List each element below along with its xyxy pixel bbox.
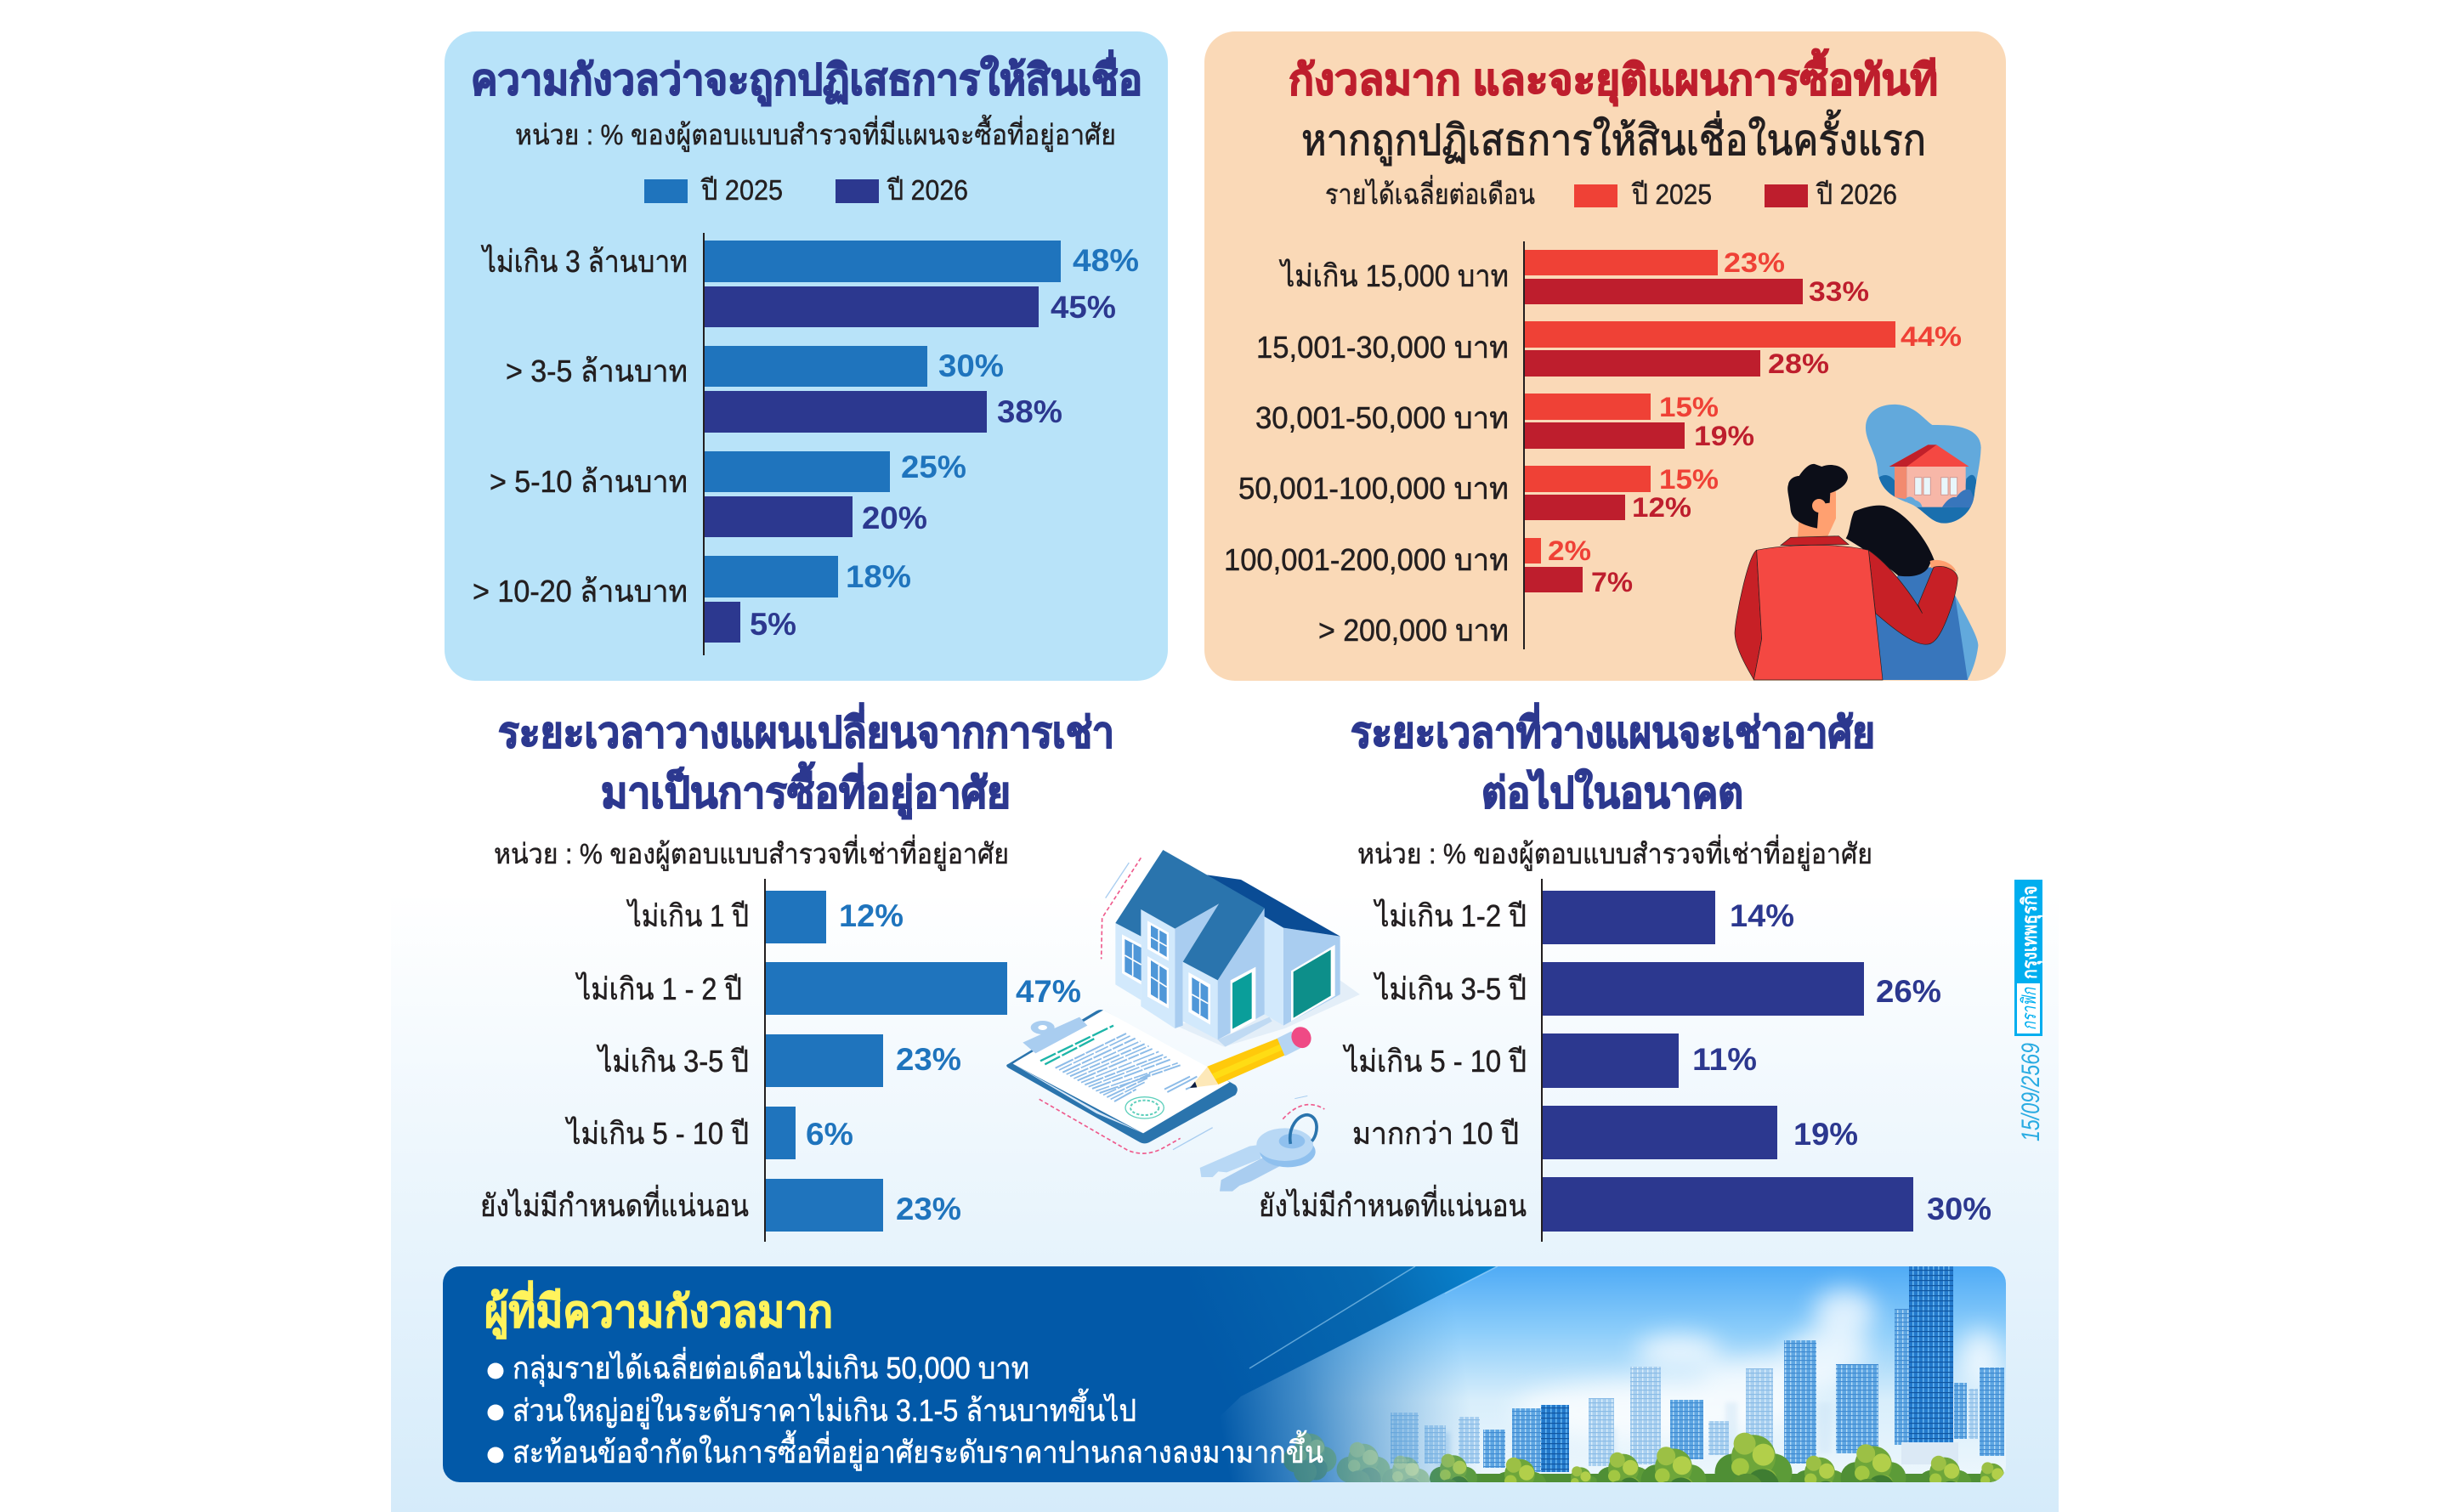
credit tag and date: กรุงเทพธุรกิจ xyxy=(2019,886,2043,979)
bar chart: years of renting: ไม่เกิน 3-5 ปี xyxy=(1373,971,1527,1006)
bar chart: years of renting: ยังไม่มีกำหนดที่แน่นอน xyxy=(1259,1185,1527,1223)
legend: ปี 2025 xyxy=(700,174,783,206)
page background gradient xyxy=(391,892,2059,1512)
heading: ระยะเวลาที่วางแผนจะเช่าอาศัย xyxy=(1351,703,1875,756)
bar chart: price bands: 5% xyxy=(750,607,796,642)
bar chart: income bands: 44% xyxy=(1901,321,1962,352)
panel: stop buying plan by income xyxy=(1204,31,2006,681)
woman xyxy=(1846,506,1978,680)
bar chart: price bands: 38% xyxy=(997,394,1062,429)
bar chart: income bands: 19% xyxy=(1694,421,1754,451)
bar chart: income bands: 12% xyxy=(1632,492,1691,523)
panel heading: ความกังวลว่าจะถูกปฏิเสธการให้สินเชื่อ xyxy=(471,50,1142,106)
banner bullet points: กลุ่มรายได้เฉลี่ยต่อเดือนไม่เกิน 50,000 บาท xyxy=(513,1347,1029,1387)
bar chart: income bands: > 200,000 บาท xyxy=(1318,613,1509,648)
bar chart: income bands: 30,001-50,000 บาท xyxy=(1255,400,1509,435)
heading xyxy=(1351,703,1875,817)
illustration: couple dreaming of a house xyxy=(1735,405,1983,680)
bar chart: years until buying: 12% xyxy=(839,898,904,933)
bar chart: price bands: 30% xyxy=(938,348,1004,383)
bar chart: years until buying: 6% xyxy=(806,1117,853,1152)
bar chart: income bands: 33% xyxy=(1809,276,1869,307)
banner bullet points: ส่วนใหญ่อยู่ในระดับราคาไม่เกิน 3.1-5 ล้านบาทขึ้นไป xyxy=(513,1388,1136,1430)
bar chart: price bands: 25% xyxy=(901,450,966,484)
bar chart: price bands: 45% xyxy=(1051,290,1116,325)
heading: ระยะเวลาวางแผนเปลี่ยนจากการเช่า xyxy=(498,703,1114,756)
legend xyxy=(644,174,968,206)
bar chart: price bands: ไม่เกิน 3 ล้านบาท xyxy=(480,244,688,279)
bar chart: income bands: 15,001-30,000 บาท xyxy=(1256,330,1509,365)
legend: ปี 2026 xyxy=(1816,178,1897,210)
banner: who is most worried xyxy=(443,1266,2006,1482)
heading: มาเป็นการซื้อที่อยู่อาศัย xyxy=(601,762,1011,819)
bar chart: years until buying: 23% xyxy=(896,1042,961,1077)
bar chart: years of renting: มากกว่า 10 ปี xyxy=(1352,1116,1519,1151)
bar chart: income bands: 2% xyxy=(1548,535,1591,566)
bar chart: years until buying: 23% xyxy=(896,1192,961,1226)
legend: รายได้เฉลี่ยต่อเดือน xyxy=(1325,175,1535,210)
credit tag and date xyxy=(2014,880,2045,1141)
bar chart: income bands xyxy=(1224,241,1962,649)
banner bullet points xyxy=(488,1347,1323,1471)
bar chart: years of renting: 26% xyxy=(1876,974,1941,1009)
illustration: house, contract, pencil and keys xyxy=(1006,850,1360,1192)
bar chart: years of renting: 19% xyxy=(1793,1117,1858,1152)
section: time planned to switch from renting to buying xyxy=(480,703,1114,1242)
banner bullet points: สะท้อนข้อจำกัดในการซื้อที่อยู่อาศัยระดับราคาปานกลางลงมามากขึ้น xyxy=(513,1430,1323,1471)
banner heading: ผู้ที่มีความกังวลมาก xyxy=(484,1281,833,1339)
bar chart: price bands: > 5-10 ล้านบาท xyxy=(490,464,688,499)
bar chart: income bands: 7% xyxy=(1591,567,1633,597)
bar chart: years until buying: ไม่เกิน 1 - 2 ปี xyxy=(575,971,742,1006)
banner skyline photo xyxy=(1227,1266,2006,1482)
bar chart: years of renting xyxy=(1259,879,1991,1242)
thought bubble with house xyxy=(1866,405,1983,526)
bar chart: years until buying: ไม่เกิน 5 - 10 ปี xyxy=(564,1116,749,1151)
heading xyxy=(498,703,1114,819)
bar chart: income bands: 50,001-100,000 บาท xyxy=(1238,471,1509,506)
bar chart: years until buying: ไม่เกิน 3-5 ปี xyxy=(596,1044,749,1079)
panel subheading: หากถูกปฏิเสธการให้สินเชื่อในครั้งแรก xyxy=(1301,110,1926,166)
bar chart: income bands: ไม่เกิน 15,000 บาท xyxy=(1278,258,1509,293)
icon: contract on clipboard xyxy=(1006,1010,1238,1153)
bar chart: income bands: 100,001-200,000 บาท xyxy=(1224,542,1509,577)
panel heading: กังวลมาก และจะยุติแผนการซื้อทันที xyxy=(1289,48,1938,106)
section: planned future renting period xyxy=(1259,703,1991,1242)
bar chart: income bands: 28% xyxy=(1768,348,1829,379)
credit tag and date: 15/09/2569 xyxy=(2017,1043,2045,1141)
heading: ต่อไปในอนาคต xyxy=(1481,768,1743,817)
bar chart: income bands: 23% xyxy=(1724,247,1785,278)
bar chart: years until buying xyxy=(480,879,1081,1242)
bar chart: years until buying: ยังไม่มีกำหนดที่แน่นอน xyxy=(480,1185,749,1223)
legend xyxy=(1325,175,1897,210)
icon: house xyxy=(1102,850,1360,1047)
bar chart: price bands: > 3-5 ล้านบาท xyxy=(506,354,688,388)
bar chart: years of renting: 30% xyxy=(1927,1192,1991,1226)
bar chart: years of renting: 14% xyxy=(1730,898,1794,933)
bar chart: price bands: 48% xyxy=(1073,243,1139,278)
legend: ปี 2026 xyxy=(887,174,968,206)
bar chart: years of renting: 11% xyxy=(1692,1042,1757,1077)
credit tag and date: กราฟิก xyxy=(2018,987,2040,1030)
icon: pencil xyxy=(1190,1023,1315,1088)
unit note: หน่วย : % ของผู้ตอบแบบสำรวจที่มีแผนจะซื้อที่อยู่อาศัย xyxy=(515,115,1116,152)
unit note: หน่วย : % ของผู้ตอบแบบสำรวจที่เช่าที่อยู่อาศัย xyxy=(494,835,1009,871)
bar chart: years of renting: ไม่เกิน 5 - 10 ปี xyxy=(1342,1044,1527,1079)
bar chart: price bands: > 10-20 ล้านบาท xyxy=(473,574,688,609)
unit note: หน่วย : % ของผู้ตอบแบบสำรวจที่เช่าที่อยู่อาศัย xyxy=(1357,835,1872,871)
bar chart: price bands: 18% xyxy=(846,559,911,594)
bar chart: income bands: 15% xyxy=(1659,464,1719,495)
bar chart: price bands xyxy=(473,233,1139,655)
icon: keys xyxy=(1200,1096,1324,1192)
bar chart: price bands: 20% xyxy=(862,501,927,535)
bar chart: years of renting: ไม่เกิน 1-2 ปี xyxy=(1373,898,1527,933)
man xyxy=(1735,464,1957,680)
bar chart: years until buying: 47% xyxy=(1016,974,1081,1009)
bar chart: years until buying: ไม่เกิน 1 ปี xyxy=(626,898,749,933)
legend: ปี 2025 xyxy=(1631,178,1712,210)
bar chart: income bands: 15% xyxy=(1659,392,1719,422)
panel: loan rejection worry by home price xyxy=(445,31,1168,681)
